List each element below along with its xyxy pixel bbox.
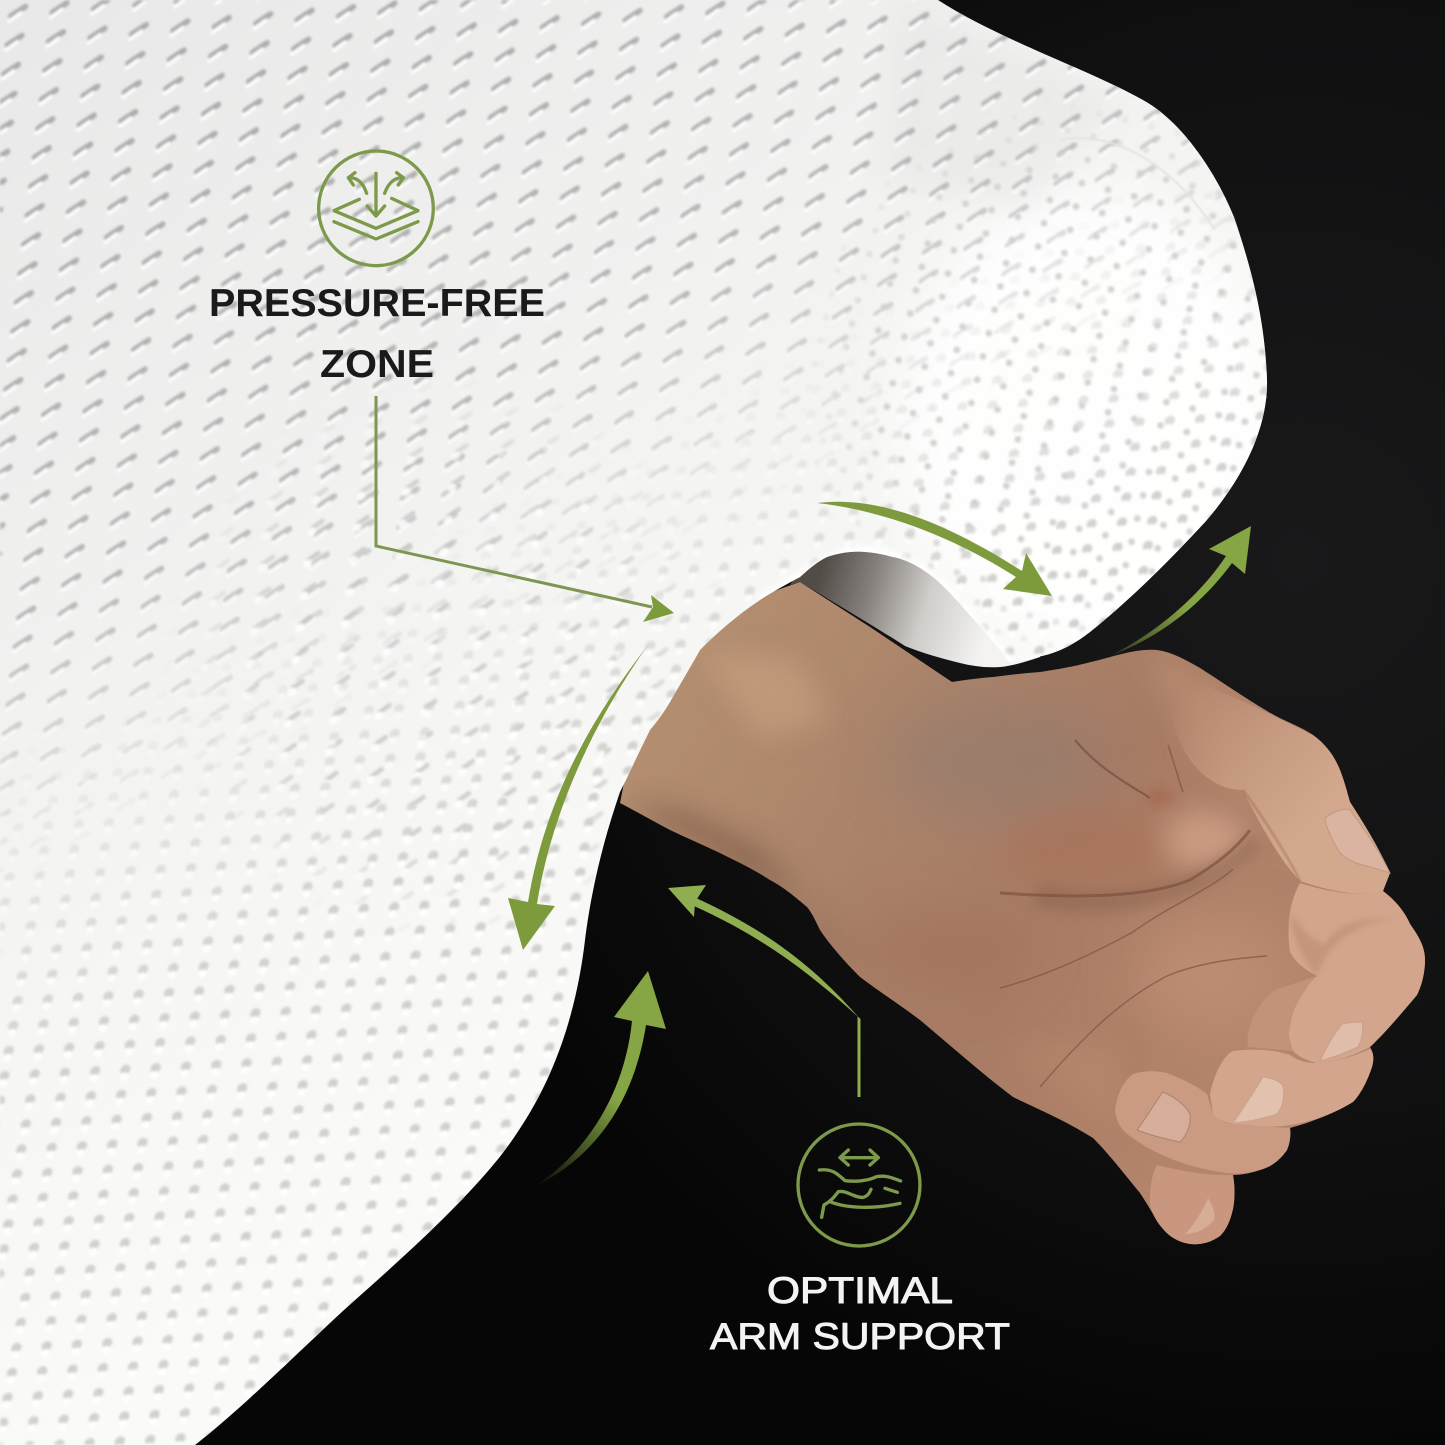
icon: arm support	[798, 1124, 920, 1246]
ring nail	[1137, 1092, 1190, 1142]
index finger shading	[1290, 912, 1395, 976]
index nail	[1320, 1022, 1363, 1061]
little nail	[1185, 1198, 1215, 1234]
heading: optimal arm support: ARM SUPPORT	[710, 1316, 1010, 1357]
thumb	[1170, 680, 1390, 894]
middle knuckle behind fingers	[1247, 976, 1317, 1051]
icon: pressure-free layers	[319, 151, 433, 266]
arrow: below wrist, pointing up	[534, 971, 666, 1187]
callout connector: optimal arm support	[668, 885, 860, 1097]
thumb nail	[1325, 809, 1390, 873]
folded pillow underside	[790, 520, 1040, 667]
arrow: pillow end, pointing up-right	[1112, 526, 1251, 655]
arrow: over pillow end, pointing down-right	[817, 502, 1052, 596]
hand and forearm	[620, 582, 1425, 1244]
hand shading	[637, 654, 1289, 1019]
palm and forearm	[620, 582, 1425, 1244]
index finger	[1288, 883, 1425, 1063]
heading: pressure-free zone	[209, 282, 545, 386]
ring finger	[1115, 1071, 1290, 1173]
middle finger	[1210, 1049, 1373, 1127]
heading: pressure-free zone: ZONE	[320, 343, 434, 386]
callout connector: pressure-free zone	[376, 396, 674, 622]
thumb web crease	[1243, 790, 1300, 881]
middle nail	[1233, 1077, 1284, 1123]
heading: optimal arm support	[710, 1270, 1010, 1357]
arrow: pillow edge, pointing down-left	[508, 645, 648, 950]
palm creases	[1000, 740, 1267, 1087]
little finger	[1150, 1165, 1234, 1244]
heading: optimal arm support: OPTIMAL	[767, 1270, 953, 1311]
heading: pressure-free zone: PRESSURE-FREE	[209, 282, 545, 325]
